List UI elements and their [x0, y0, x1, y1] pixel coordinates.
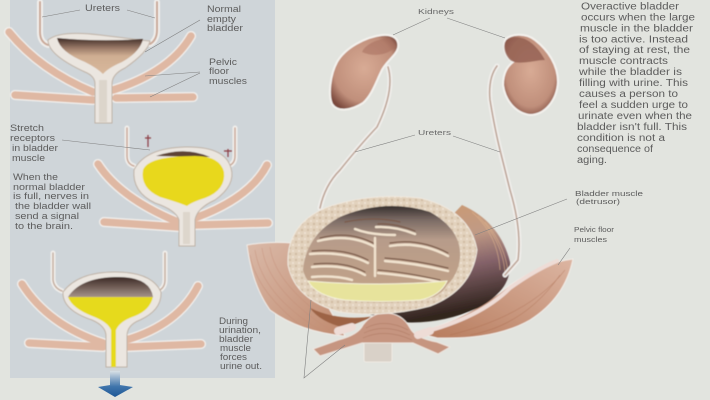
- label: pelvic floor muscles: floor: [209, 66, 229, 76]
- urethra stub: [364, 340, 392, 362]
- right wing bone: [420, 261, 557, 333]
- right wing muscle: [417, 259, 573, 338]
- label: pelvic floor muscles: Pelvic: [209, 57, 238, 67]
- label: ureters: Ureters: [85, 3, 121, 13]
- text: overactive bladder description: while the bladder is: [578, 67, 682, 78]
- label: stretch receptors: Stretch: [10, 123, 44, 133]
- kidney left: [330, 35, 398, 110]
- text: overactive bladder description: filling with urine. This: [579, 78, 688, 89]
- text: overactive bladder description: of staying at rest, the: [579, 45, 691, 56]
- text: overactive bladder description: Overactive bladder: [581, 2, 680, 12]
- text: overactive bladder description: aging.: [577, 155, 607, 166]
- diagram: normal empty bladder: [9, 2, 193, 123]
- label: normal empty bladder: [207, 4, 243, 33]
- interior: [303, 206, 460, 302]
- label: normal empty bladder: Normal: [207, 4, 241, 14]
- label: kidneys: Kidneys: [418, 7, 454, 16]
- text: during urination: [219, 316, 262, 371]
- text: full bladder explanation: the bladder wall: [15, 201, 91, 211]
- ureter right: [490, 66, 519, 275]
- text: overactive bladder description: muscle in the bladder: [580, 24, 694, 34]
- text: during urination: bladder: [219, 334, 253, 344]
- text: during urination: muscle: [220, 343, 251, 353]
- text: overactive bladder description: occurs when the large: [581, 12, 695, 24]
- dark top: [68, 277, 153, 297]
- arrow: urine flow: [98, 371, 133, 397]
- label: stretch receptors: in bladder: [12, 143, 58, 153]
- left wing muscle: [247, 242, 345, 336]
- text: full bladder explanation: is full, nerves in: [13, 191, 89, 201]
- ureters: [40, 2, 157, 45]
- label: stretch receptors: [10, 123, 58, 163]
- pelvic floor muscles: [98, 164, 268, 227]
- text: full bladder explanation: When the: [13, 172, 58, 182]
- label: ureters right: Ureters: [418, 128, 451, 137]
- text: full bladder explanation: to the brain.: [15, 221, 73, 231]
- diagram: full bladder: [98, 128, 268, 246]
- muscle ridges: [472, 212, 508, 272]
- text: overactive bladder description: [577, 2, 695, 166]
- fold shadows: [312, 219, 448, 280]
- text: overactive bladder description: bladder isn't full. This: [577, 122, 687, 133]
- diagram: urination: [22, 253, 201, 367]
- text: during urination: urine out.: [220, 361, 262, 371]
- bladder wall: [48, 33, 150, 123]
- wing stripes: [250, 247, 335, 330]
- label: bladder muscle: (detrusor): [576, 197, 621, 206]
- label: pelvic floor muscles right: [574, 225, 615, 244]
- pelvic floor muscles: [22, 284, 201, 347]
- text: full bladder explanation: [13, 172, 91, 231]
- large bladder anatomy: [247, 66, 573, 362]
- urine: [308, 281, 447, 302]
- bladder muscle back: [360, 205, 510, 322]
- label: stretch receptors: receptors: [10, 133, 56, 143]
- text: during urination: forces: [220, 352, 248, 362]
- pelvic band: [313, 313, 450, 356]
- text: overactive bladder description: consequence of: [577, 144, 653, 155]
- label: pelvic floor muscles right: muscles: [574, 235, 607, 244]
- upper lobe shading: [504, 37, 545, 63]
- bones: [338, 327, 430, 335]
- label: pelvic floor muscles right: Pelvic floor: [574, 225, 615, 234]
- bladder interior: [57, 38, 143, 74]
- text: full bladder explanation: normal bladder: [13, 182, 85, 192]
- text: overactive bladder description: is too active. Instead: [579, 34, 688, 46]
- text: overactive bladder description: urinate even when the: [578, 111, 693, 122]
- wall: [288, 196, 477, 314]
- text: overactive bladder description: condition is not a: [577, 133, 665, 144]
- label: stretch receptors: muscle: [12, 153, 45, 163]
- band stripes: [363, 323, 412, 340]
- label: normal empty bladder: empty: [207, 14, 237, 24]
- underside: [310, 308, 375, 328]
- dark top: [156, 151, 210, 157]
- text: overactive bladder description: feel a sudden urge to: [579, 100, 688, 111]
- ureters: [53, 253, 165, 291]
- text: during urination: During: [219, 316, 248, 326]
- text: overactive bladder description: causes a person to: [579, 89, 679, 100]
- label: bladder muscle: [575, 189, 643, 206]
- label: pelvic floor muscles: muscles: [209, 76, 248, 86]
- label: bladder muscle: Bladder muscle: [575, 189, 643, 198]
- label: normal empty bladder: bladder: [207, 23, 243, 33]
- ureters: [127, 128, 235, 166]
- text: full bladder explanation: send a signal: [15, 211, 79, 221]
- urine: [68, 297, 153, 367]
- upper lobe shading: [362, 38, 396, 55]
- stretch signal arrows: [145, 135, 232, 157]
- urine: [143, 156, 224, 206]
- panel: bladder stages: [10, 0, 275, 378]
- text: during urination: urination,: [219, 325, 261, 335]
- leader lines: [42, 10, 570, 378]
- label: pelvic floor muscles: [209, 57, 248, 86]
- ureter left: [320, 67, 390, 208]
- right wing stripes: [450, 270, 565, 335]
- bladder wall: [134, 147, 232, 246]
- kidney right: [503, 35, 558, 115]
- bladder wall: [63, 272, 161, 367]
- pelvic floor muscles: [9, 32, 193, 100]
- folds: [310, 227, 448, 282]
- text: overactive bladder description: muscle contracts: [579, 56, 668, 67]
